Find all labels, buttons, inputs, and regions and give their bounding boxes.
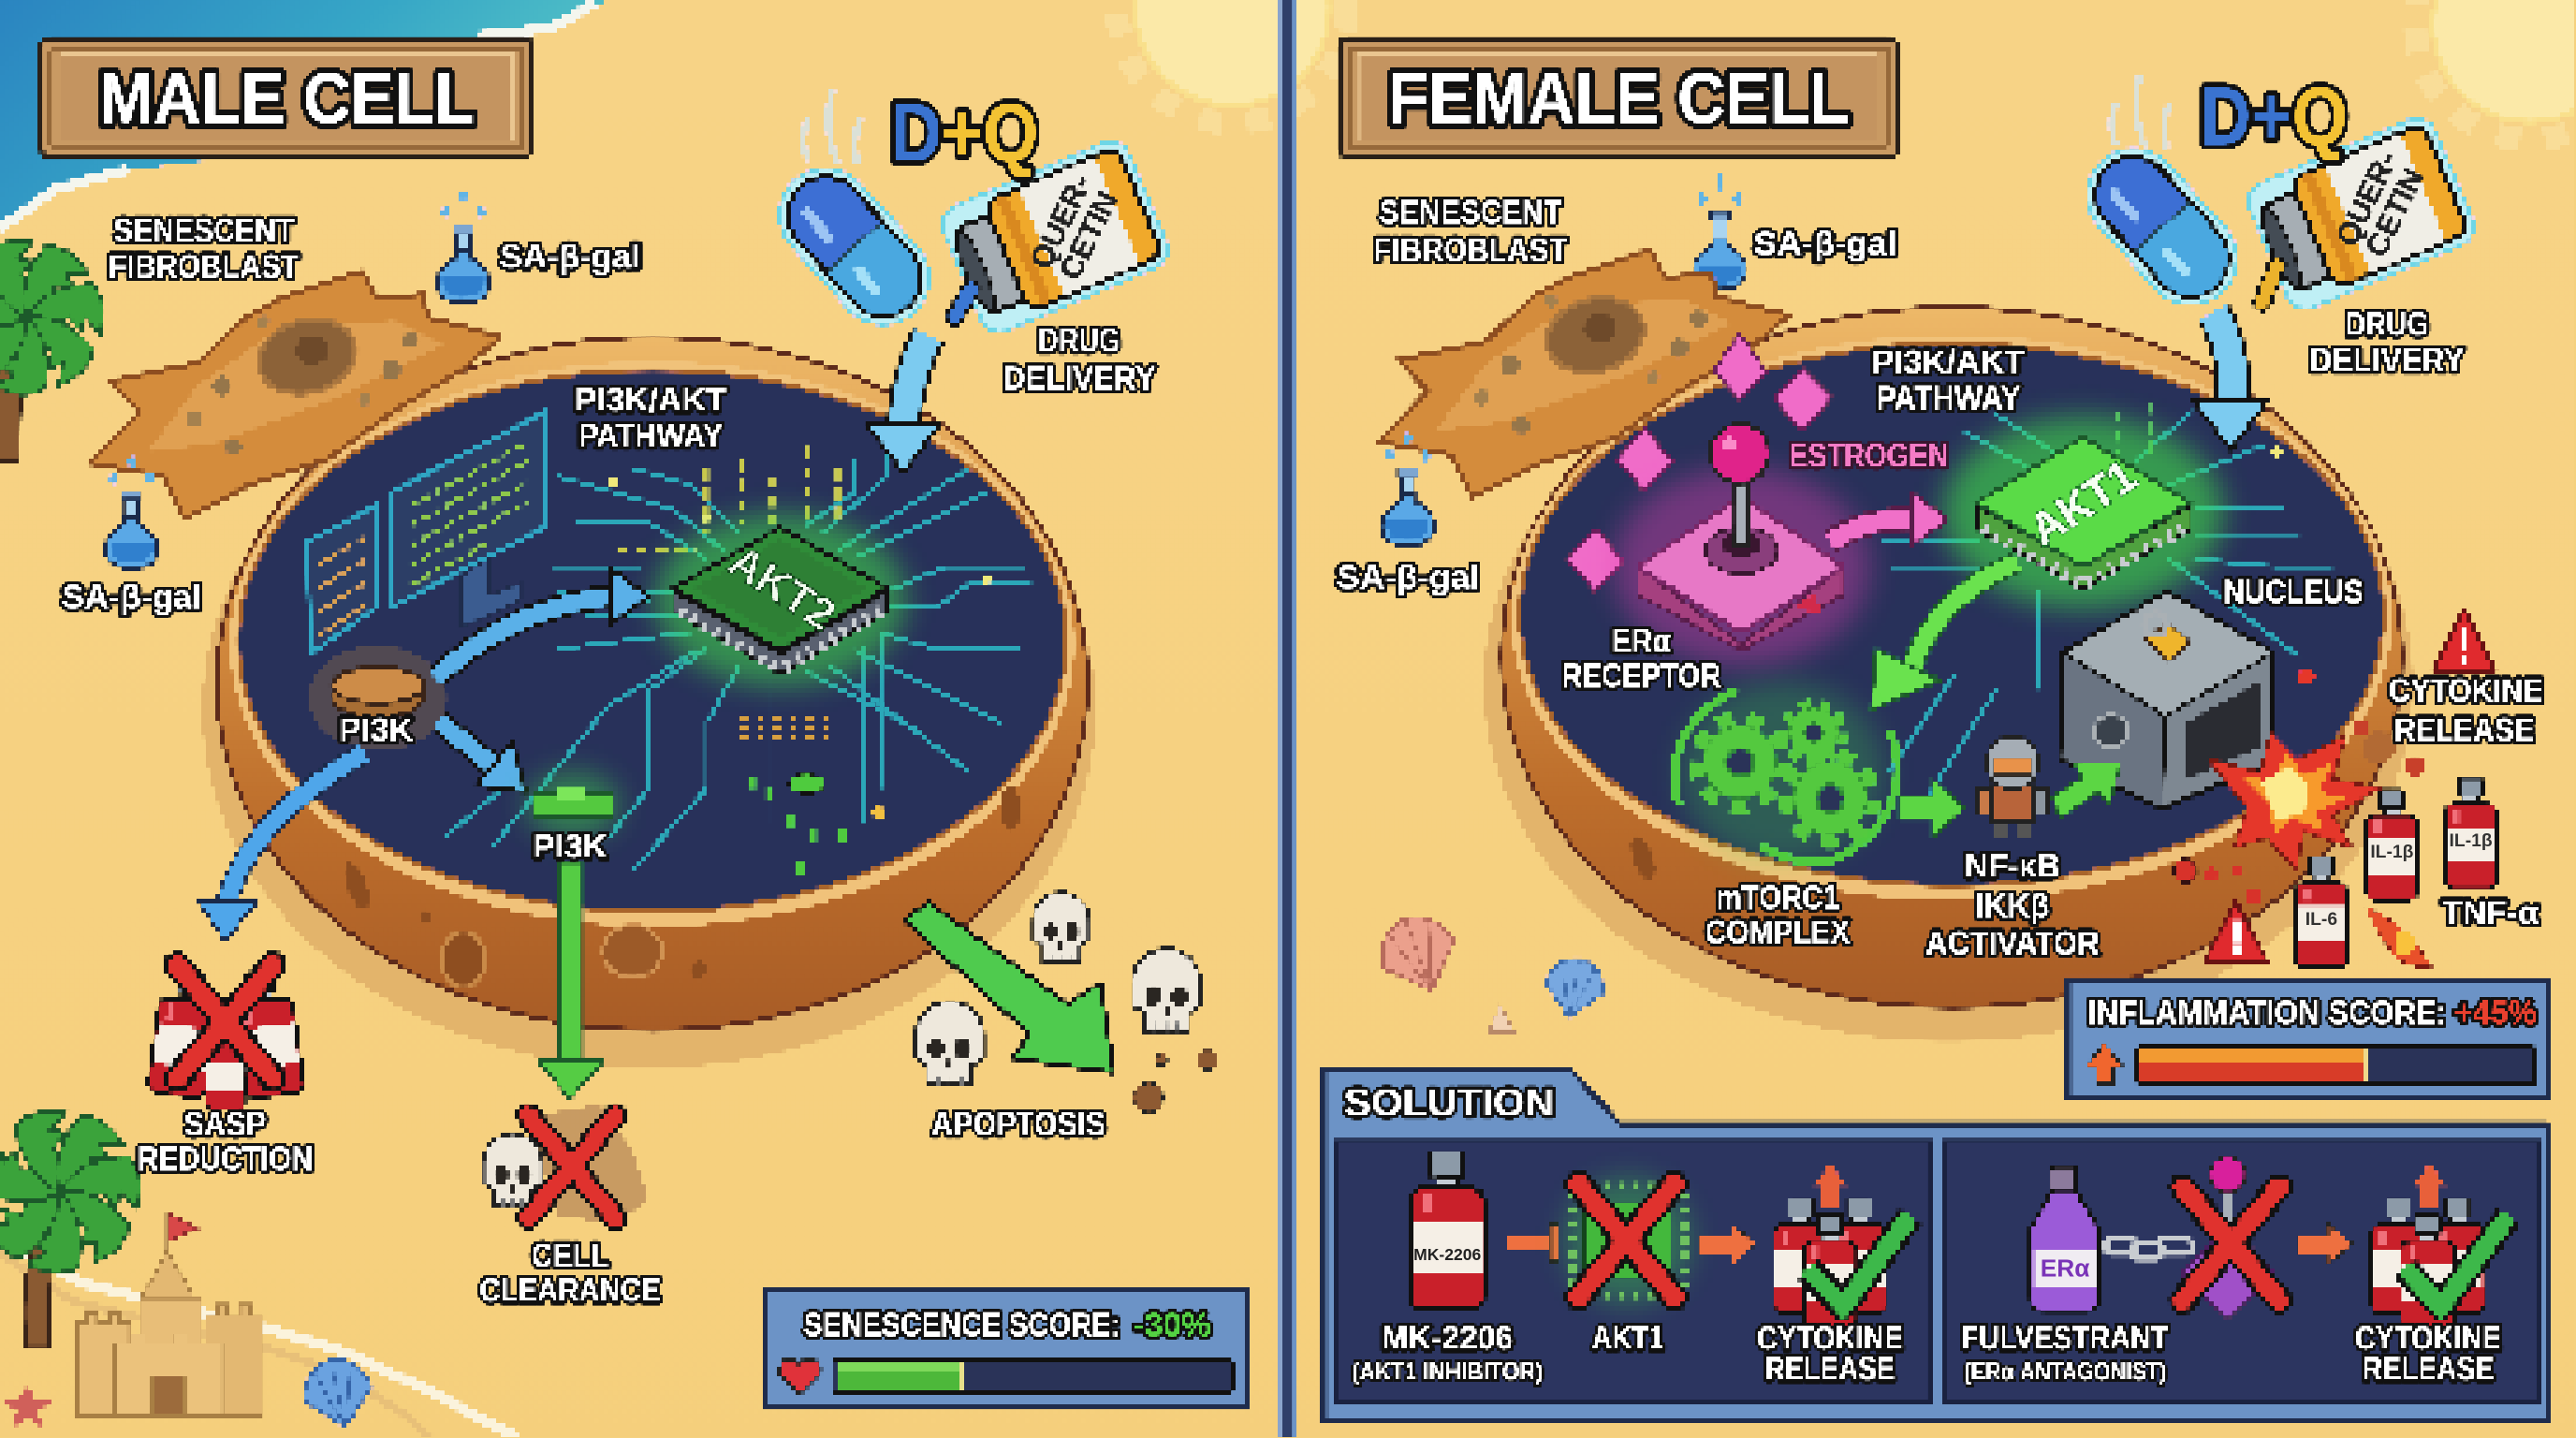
label: SASP reduction xyxy=(138,1107,313,1178)
steam xyxy=(803,91,861,165)
chip text: AKT1: AKT1 xyxy=(2021,450,2145,555)
panel: solution xyxy=(1325,1070,2548,1421)
label: drug delivery xyxy=(1003,323,1156,397)
label: estrogen: ESTROGEN xyxy=(1789,437,1949,474)
label: fulvestrant: FULVESTRANT xyxy=(1962,1320,2169,1357)
label: NF-κB IKKβ activator: NF-κB xyxy=(1965,848,2060,885)
label: NF-κB IKKβ activator xyxy=(1925,848,2100,962)
arrow: to cell clearance xyxy=(539,862,603,1099)
text: senescence score: SENESCENCE SCORE: xyxy=(803,1307,1120,1343)
label: senescent fibroblast xyxy=(1373,195,1568,269)
label: cytokine release: CYTOKINE xyxy=(2355,1320,2501,1357)
label: NF-κB IKKβ activator: ACTIVATOR xyxy=(1925,926,2100,962)
ocean xyxy=(0,0,607,230)
icon: joystick crossed xyxy=(2182,1157,2279,1318)
label: senescent fibroblast xyxy=(109,213,300,286)
flask lower left xyxy=(1382,431,1434,546)
label: nucleus: NUCLEUS xyxy=(2223,574,2364,610)
sun xyxy=(2415,0,2576,139)
icon: shells xyxy=(1369,906,1609,1032)
text: D+Q: D+Q xyxy=(2200,70,2348,162)
sun xyxy=(1117,0,1347,124)
label: senescent fibroblast: FIBROBLAST xyxy=(109,249,300,286)
sandcastle xyxy=(78,1214,263,1416)
panel: senescence score xyxy=(764,1290,1249,1408)
arrow: to SASP xyxy=(198,753,365,942)
bottle text: quercetin: QUER- xyxy=(1024,169,1099,274)
icon: chain xyxy=(2106,1239,2191,1258)
icon: inhibit arrow xyxy=(1506,1224,1558,1262)
label: cell clearance: CLEARANCE xyxy=(480,1272,661,1309)
arrow: knight to safe xyxy=(2052,762,2121,818)
icon: AKT1 chip crossed xyxy=(1566,1178,1690,1303)
label: SA-beta-gal left: SA-β-gal xyxy=(1337,559,1479,595)
label: SA-beta-gal: SA-β-gal xyxy=(1754,226,1896,262)
panel: female cell xyxy=(1325,0,2576,1421)
label: SA-beta-gal: SA-β-gal xyxy=(500,239,641,275)
label: cell clearance xyxy=(480,1238,661,1309)
icon: warning top xyxy=(2433,609,2496,670)
vial text: MK-2206: MK-2206 xyxy=(1413,1245,1482,1264)
bottle text: quercetin: CETIN xyxy=(1053,186,1125,286)
icon: SASP vials crossed xyxy=(147,965,305,1109)
label: MK-2206 xyxy=(1352,1320,1543,1386)
label: PI3K/AKT pathway: PATHWAY xyxy=(578,418,723,454)
label: cytokine release: RELEASE xyxy=(1765,1351,1895,1387)
label: cytokine release: CYTOKINE xyxy=(2389,672,2543,709)
label: cell clearance: CELL xyxy=(532,1238,608,1274)
label: PI3K/AKT pathway: PI3K/AKT xyxy=(575,382,726,418)
label: SASP reduction: SASP xyxy=(184,1107,266,1143)
vial text: IL-6: IL-6 xyxy=(2305,910,2337,930)
title: male cell: MALE CELL xyxy=(98,59,475,139)
label: MK-2206: MK-2206 xyxy=(1382,1320,1513,1357)
label: ERα receptor xyxy=(1561,624,1720,695)
heading: solution: SOLUTION xyxy=(1344,1081,1554,1124)
icon: MK-2206 vial xyxy=(1411,1152,1485,1310)
text: inflammation score: +45% xyxy=(2454,994,2537,1031)
palm tree top left xyxy=(0,234,109,460)
cell shadow xyxy=(202,352,1096,1068)
arrow: PI3K to receptor xyxy=(439,721,526,792)
icon: cell clearance xyxy=(483,1104,649,1224)
cell shadow xyxy=(1484,325,2413,1042)
label: cytokine release xyxy=(2355,1320,2501,1387)
node: PI3K disk xyxy=(309,646,446,751)
bar: score xyxy=(833,1358,1232,1393)
icon: flame xyxy=(2365,907,2431,966)
icon: blue shell xyxy=(297,1353,378,1434)
arrow: drug delivery xyxy=(2191,312,2269,450)
arrow: PI3K to AKT2 xyxy=(435,568,649,679)
bottle text: quercetin xyxy=(2330,146,2433,265)
label: mTORC1 complex: COMPLEX xyxy=(1705,914,1851,950)
panel: male cell xyxy=(0,0,1347,1438)
arrow: to cytokine xyxy=(2297,1224,2352,1265)
icon: up arrow xyxy=(2086,1043,2123,1084)
label: fulvestrant xyxy=(1962,1320,2169,1386)
icon: ERα joystick xyxy=(1613,424,1869,666)
icon: IL-1β vial xyxy=(2366,790,2418,900)
icon: IL-1β vial 2 xyxy=(2445,778,2496,888)
plate: female cell title xyxy=(1339,37,1897,157)
arrow: estrogen signal xyxy=(1830,493,1949,546)
label: drug delivery xyxy=(2310,306,2465,379)
vial text: IL-1β second: IL-1β xyxy=(2450,831,2493,851)
label: cytokine release: RELEASE xyxy=(2394,712,2534,749)
label: drug delivery: DELIVERY xyxy=(1003,360,1156,397)
label: NF-κB IKKβ activator: IKKβ xyxy=(1975,888,2049,924)
label: PI3K: PI3K xyxy=(339,712,414,749)
label: AKT1: AKT1 xyxy=(1592,1320,1664,1357)
label: ERα receptor: ERα xyxy=(1612,624,1671,660)
cell body xyxy=(1501,307,2402,1007)
node: green receptor xyxy=(527,772,620,838)
icons: skulls xyxy=(915,892,1218,1112)
label: apoptosis: APOPTOSIS xyxy=(931,1107,1105,1143)
label: drug delivery: DELIVERY xyxy=(2310,343,2465,379)
icon: explosion xyxy=(2174,668,2424,905)
small green dots xyxy=(748,774,846,874)
icon: capsule xyxy=(761,150,948,344)
label: drug delivery: DRUG xyxy=(2345,306,2429,343)
icon: starfish xyxy=(5,1384,52,1428)
label: senescent fibroblast: SENESCENT xyxy=(1379,195,1562,231)
vial text: IL-1β: IL-1β xyxy=(2370,843,2414,862)
icon: flask xyxy=(1693,174,1747,289)
sub-panel: fulvestrant xyxy=(1945,1142,2539,1403)
label: MK-2206: (AKT1 INHIBITOR) xyxy=(1352,1357,1543,1386)
arrow: to cytokine xyxy=(1701,1224,1756,1265)
label: PI3K/AKT pathway xyxy=(575,382,726,454)
icon: capsule xyxy=(2069,130,2256,324)
label: SASP reduction: REDUCTION xyxy=(138,1141,313,1178)
label: mTORC1 complex: mTORC1 xyxy=(1716,880,1839,917)
fibroblast cell xyxy=(1379,250,1789,498)
arrow: AKT1 to mTORC1 xyxy=(1871,562,2017,710)
arrow: to apoptosis xyxy=(903,902,1114,1073)
label: TNF-α: TNF-α xyxy=(2442,894,2539,931)
icon: cytokine vials checked xyxy=(1774,1164,1910,1330)
bottle text: ERα: ERα xyxy=(2041,1255,2089,1283)
chip: AKT1 xyxy=(1943,418,2223,608)
panel: inflammation score xyxy=(2069,979,2548,1097)
palm tree bottom left xyxy=(0,1104,146,1347)
cell body xyxy=(217,337,1088,1030)
icon: nucleus safe xyxy=(2060,592,2274,808)
icon: quercetin bottle xyxy=(2243,112,2480,315)
label: senescent fibroblast: FIBROBLAST xyxy=(1373,232,1568,269)
icon: NF-κB knight xyxy=(1978,736,2047,838)
label: SA-beta-gal left: SA-β-gal xyxy=(62,579,201,615)
label: PI3K/AKT pathway xyxy=(1872,344,2026,417)
flask lower left xyxy=(105,453,158,568)
title: female cell: FEMALE CELL xyxy=(1388,59,1850,139)
bottle text: quercetin xyxy=(1024,169,1127,288)
icon: IL-6 vial xyxy=(2296,858,2347,967)
label: cytokine release xyxy=(2389,672,2543,749)
text: D+Q: D+Q xyxy=(890,87,1038,179)
shoreline bottom left xyxy=(0,1238,518,1438)
arrow: drug delivery xyxy=(866,335,940,473)
steam xyxy=(2112,74,2170,148)
label: PI3K 2: PI3K xyxy=(534,829,607,865)
fibroblast cell xyxy=(91,271,501,520)
circuit traces xyxy=(444,444,1032,871)
label: PI3K/AKT pathway: PI3K/AKT xyxy=(1872,344,2026,380)
arrow: gears to knight xyxy=(1899,779,1965,838)
bottle text: quercetin: QUER- xyxy=(2330,146,2405,252)
icon: quercetin bottle xyxy=(937,136,1174,338)
icon: cytokine vials checked xyxy=(2372,1164,2509,1330)
divider between panels xyxy=(1277,0,1298,1438)
label: fulvestrant: (ERα ANTAGONIST) xyxy=(1964,1357,2166,1386)
icon: fulvestrant bottle xyxy=(2030,1167,2100,1312)
label: drug delivery: DRUG xyxy=(1038,323,1120,360)
bar: inflammation xyxy=(2137,1047,2535,1084)
label: cytokine release: CYTOKINE xyxy=(1757,1320,1903,1357)
text: senescence score: -30% xyxy=(1134,1307,1211,1343)
chip: AKT2 xyxy=(655,514,905,685)
text: inflammation score: INFLAMMATION SCORE: xyxy=(2088,994,2446,1031)
label: PI3K/AKT pathway: PATHWAY xyxy=(1876,380,2021,417)
icon: mTORC1 gears xyxy=(1675,682,1897,862)
icon: warning bottom xyxy=(2204,901,2267,961)
label: cytokine release xyxy=(1757,1320,1903,1387)
label: cytokine release: RELEASE xyxy=(2363,1351,2494,1387)
monitors xyxy=(307,413,544,654)
chip text: AKT2: AKT2 xyxy=(720,536,844,640)
label: senescent fibroblast: SENESCENT xyxy=(113,213,295,249)
label: mTORC1 complex xyxy=(1705,880,1851,950)
plate: male cell title xyxy=(41,37,533,157)
bottle text: quercetin: CETIN xyxy=(2359,163,2431,262)
sub-panel: MK-2206 xyxy=(1338,1142,1928,1403)
circuit traces xyxy=(1881,403,2333,805)
icon: heart xyxy=(780,1358,820,1393)
icon: flask xyxy=(437,187,490,302)
icon: estrogen gems xyxy=(1567,333,1832,592)
label: ERα receptor: RECEPTOR xyxy=(1561,658,1720,695)
